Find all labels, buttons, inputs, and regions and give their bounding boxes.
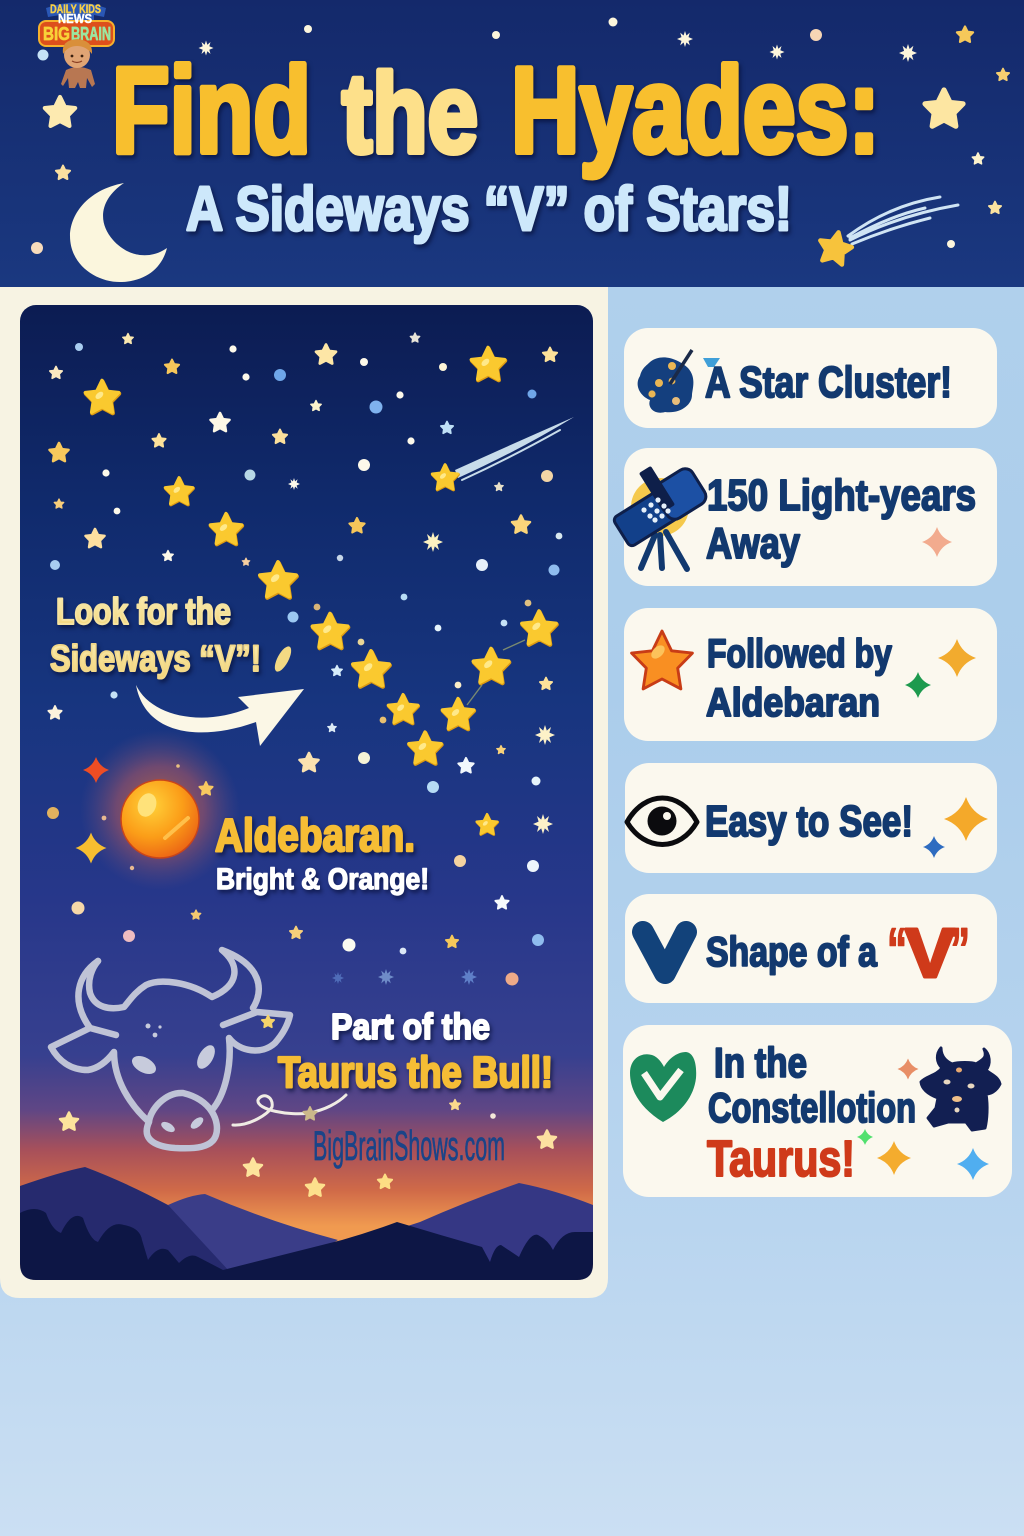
logo: Daily Kids News with Big Brain — [39, 2, 114, 88]
icons: sparkles — [923, 797, 988, 858]
text: in the constellation Taurus: In the — [714, 1039, 807, 1086]
icons: sparkles — [857, 1058, 989, 1180]
icon: green heart with V — [630, 1052, 696, 1122]
sideways V star pattern — [260, 562, 557, 764]
panel: night sky frame — [0, 287, 608, 1298]
text: in the constellation Taurus — [707, 1039, 916, 1187]
panel: fact card 2 distance: Away — [706, 519, 800, 568]
text: shape of a V: V — [905, 914, 955, 992]
icon: blue V — [643, 932, 686, 973]
text: shape of a V: Shape of a — [706, 928, 878, 975]
icon: crescent moon — [70, 183, 167, 282]
icon: eye — [627, 798, 697, 844]
label: Aldebaran — [215, 809, 429, 896]
header scattered stars — [31, 18, 1009, 254]
text: easy to see: Easy to See! — [705, 797, 913, 846]
panel: fact card 5 shape of a V — [625, 894, 997, 1003]
label: part of Taurus the Bull: Taurus the Bull! — [278, 1048, 553, 1097]
shooting star in sky — [432, 417, 574, 490]
text: a star cluster: A Star Cluster! — [705, 358, 952, 407]
panel: fact card 3 Aldebaran — [624, 608, 997, 741]
panel: fact card 3 Aldebaran: Aldebaran — [706, 681, 880, 725]
logo: Daily Kids News with Big Brain: BRAIN — [71, 24, 111, 44]
watermark: BigBrainShows.com — [313, 1122, 505, 1169]
icon: star cluster — [638, 350, 720, 413]
panel: header band — [0, 0, 1024, 287]
icon: telescope — [612, 465, 709, 569]
callout: look for the sideways V — [50, 591, 294, 679]
panel: fact card 4 easy to see — [625, 763, 997, 873]
callout: look for the sideways V: Sideways “V”! — [50, 638, 261, 679]
text: followed by Aldebaran: Followed by — [707, 632, 893, 676]
panel: fact card 2 distance — [612, 448, 997, 586]
label: Aldebaran: Bright & Orange! — [216, 863, 429, 896]
icon: peach sparkle — [922, 527, 952, 557]
title — [112, 42, 880, 178]
text: shape of a V: ” — [950, 916, 970, 983]
panel: fact card 1 star cluster — [624, 328, 997, 428]
title: Find — [112, 42, 311, 178]
icons: sparkles — [905, 639, 976, 698]
label: Aldebaran: Aldebaran. — [215, 809, 415, 861]
subtitle: A Sideways “V” of Stars! — [186, 175, 792, 244]
mountains — [20, 1167, 593, 1280]
icon: Aldebaran star — [47, 730, 240, 890]
icon: orange star — [632, 631, 692, 689]
text: 150 light-years away: 150 Light-years — [707, 471, 976, 520]
logo: Daily Kids News with Big Brain: BIG — [43, 24, 70, 44]
logo: Daily Kids News with Big Brain: DAILY KIDS — [50, 2, 101, 16]
text: in the constellation Taurus: Constellotion — [708, 1084, 916, 1131]
panel: fact card 6 constellation Taurus — [623, 1025, 1012, 1197]
text: in the constellation Taurus: Taurus! — [707, 1130, 855, 1187]
text: shape of a V — [706, 914, 970, 992]
icon: shooting star — [816, 197, 958, 266]
icon: little bull — [921, 1048, 1000, 1130]
label: part of Taurus the Bull — [278, 1006, 553, 1097]
logo: Daily Kids News with Big Brain: NEWS — [58, 11, 92, 26]
constellation: Taurus bull outline — [51, 950, 346, 1148]
label: part of Taurus the Bull: Part of the — [331, 1006, 490, 1047]
title: the — [342, 51, 478, 176]
arrow to the V — [136, 685, 304, 746]
text: shape of a V: “ — [887, 916, 907, 983]
sky stars and dots — [48, 333, 562, 1196]
title: Hyades: — [511, 42, 880, 178]
callout: look for the sideways V: Look for the — [56, 591, 231, 632]
